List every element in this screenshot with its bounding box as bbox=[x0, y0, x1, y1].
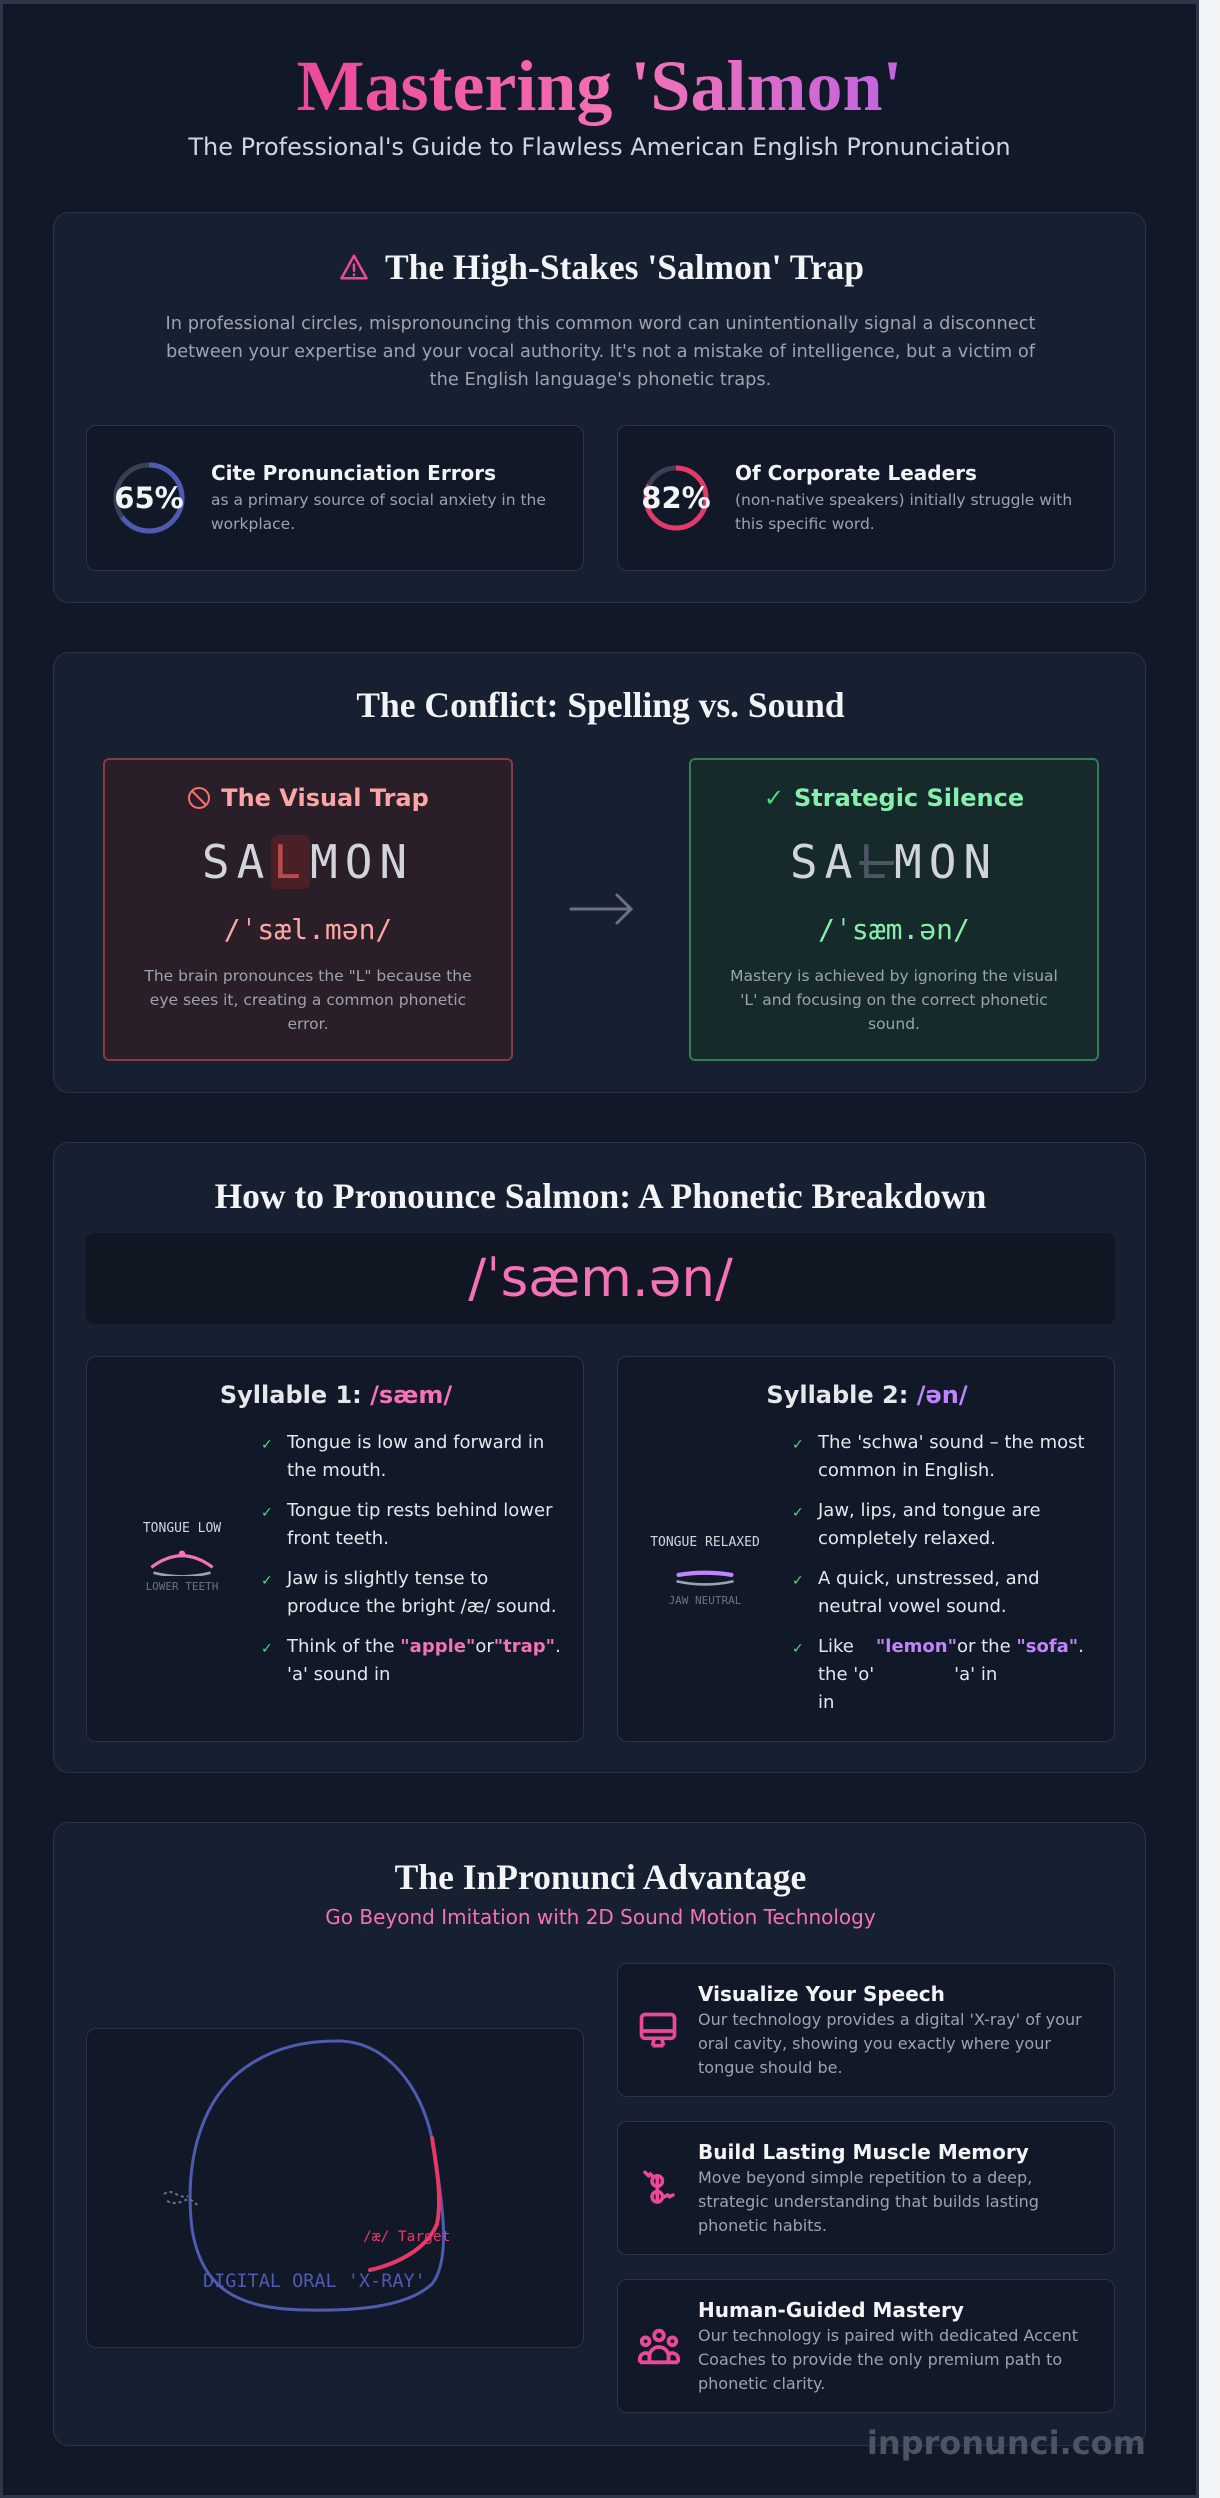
watermark: inpronunci.com bbox=[867, 2424, 1146, 2462]
ipa correct: /ˈsæm.ən/ bbox=[818, 913, 970, 946]
panel: conflict bbox=[53, 652, 1146, 1093]
stat card: 65%: as a primary source of social anxiety in the workplace. bbox=[211, 491, 546, 533]
subtitle: The Professional's Guide to Flawless American English Pronunciation bbox=[188, 133, 1011, 161]
card: syllable 2: common in English. bbox=[818, 1460, 995, 1481]
chart: digital oral x-ray bbox=[86, 2028, 584, 2348]
title: Mastering 'Salmon' bbox=[296, 46, 902, 126]
card: syllable 2: ✓ bbox=[792, 1573, 804, 1589]
intro paragraph: In professional circles, mispronouncing this common word can unintentionally signal a disconnect between your expertise and your vocal authority. It's not a mistake of intelligence, but a victim of the English language's phonetic traps. bbox=[166, 313, 1035, 390]
ipa banner: /ˈsæm.ən/ bbox=[468, 1248, 733, 1309]
arrow bbox=[570, 893, 633, 924]
syllable 2 title: Syllable 2: /ən/ bbox=[766, 1381, 968, 1409]
tongue low diagram: LOWER TEETH bbox=[146, 1580, 218, 1593]
feature card: visualize: Our technology provides a digital 'X-ray' of your oral cavity, showing you exactly where your tongue should be. bbox=[698, 2010, 1082, 2077]
card: syllable 1: 'a' sound in bbox=[287, 1664, 390, 1685]
ipa wrong: /ˈsæl.mən/ bbox=[224, 913, 392, 946]
stat card: 65%: 65% bbox=[114, 481, 184, 515]
card: syllable 1 bbox=[86, 1356, 584, 1742]
heading: breakdown: How to Pronounce Salmon: A Phonetic Breakdown bbox=[215, 1176, 986, 1216]
card title: visual trap: The Visual Trap bbox=[221, 784, 429, 812]
checklist syllable 2 bbox=[792, 1432, 1085, 1713]
card: syllable 1: the mouth. bbox=[287, 1460, 386, 1481]
stat card: 82%: Of Corporate Leaders bbox=[735, 461, 977, 485]
syllable 1 title: Syllable 1: /sæm/ bbox=[220, 1381, 452, 1409]
card: syllable 1: ✓ bbox=[261, 1505, 273, 1521]
feature card: human-guided bbox=[617, 2279, 1115, 2413]
card: syllable 2: A quick, unstressed, and bbox=[818, 1568, 1040, 1589]
card: syllable 2: The 'schwa' sound – the most bbox=[818, 1432, 1085, 1453]
icon: muscle bbox=[643, 2170, 675, 2204]
card title: strategic silence: ✓ Strategic Silence bbox=[764, 784, 1024, 812]
tongue relaxed diagram: TONGUE RELAXED bbox=[650, 1535, 760, 1550]
card: syllable 2: in bbox=[818, 1692, 834, 1713]
card: syllable 1: ✓ bbox=[261, 1437, 273, 1453]
card: syllable 2: ✓ bbox=[792, 1641, 804, 1657]
heading: conflict: The Conflict: Spelling vs. Sound bbox=[356, 685, 845, 725]
card: syllable 2: Jaw, lips, and tongue are bbox=[818, 1500, 1041, 1521]
description: The brain pronounces the "L" because the eye sees it, creating a common phonetic error. bbox=[144, 967, 472, 1033]
stat card: 82%: 82% bbox=[641, 481, 711, 515]
card: syllable 1: Tongue tip rests behind lower bbox=[287, 1500, 552, 1521]
feature card: muscle memory: Move beyond simple repetition to a deep, strategic understanding that builds lasting phonetic habits. bbox=[698, 2168, 1039, 2235]
panel: advantage bbox=[53, 1822, 1146, 2446]
checklist syllable 1 bbox=[261, 1432, 561, 1685]
ipa banner bbox=[86, 1233, 1115, 1324]
ring chart 65% bbox=[114, 462, 184, 534]
subheading: Go Beyond Imitation with 2D Sound Motion Technology bbox=[325, 1905, 876, 1929]
chart: digital oral x-ray: DIGITAL ORAL 'X-RAY' bbox=[203, 2271, 426, 2292]
heading: high-stakes: The High-Stakes 'Salmon' Trap bbox=[385, 247, 864, 287]
card: syllable 1: Think of the "apple"or"trap". bbox=[287, 1636, 561, 1657]
card: syllable 2: the 'o' 'a' in bbox=[818, 1664, 997, 1685]
icon: people bbox=[638, 2328, 680, 2364]
feature card: visualize bbox=[617, 1963, 1115, 2097]
card: syllable 1: Tongue is low and forward in bbox=[287, 1432, 544, 1453]
tongue relaxed diagram bbox=[650, 1535, 760, 1607]
card: syllable 1: ✓ bbox=[261, 1641, 273, 1657]
description: Mastery is achieved by ignoring the visual 'L' and focusing on the correct phonetic sound. bbox=[730, 967, 1058, 1033]
panel: high-stakes trap bbox=[53, 212, 1146, 603]
ring chart 82% bbox=[644, 466, 708, 530]
stat card: 82% bbox=[617, 425, 1115, 571]
stat card: 65%: Cite Pronunciation Errors bbox=[211, 461, 496, 485]
word: salmon silent L: SALMON bbox=[790, 835, 998, 889]
tongue low diagram: TONGUE LOW bbox=[143, 1521, 221, 1536]
word: salmon with L: SALMON bbox=[202, 835, 414, 889]
stat card: 65% bbox=[86, 425, 584, 571]
tongue low diagram bbox=[143, 1521, 222, 1593]
feature card: muscle memory bbox=[617, 2121, 1115, 2255]
feature card: muscle memory: Build Lasting Muscle Memory bbox=[698, 2140, 1029, 2164]
panel: phonetic breakdown bbox=[53, 1142, 1146, 1773]
card: syllable 2: completely relaxed. bbox=[818, 1528, 996, 1549]
card: syllable 2: neutral vowel sound. bbox=[818, 1596, 1007, 1617]
card: syllable 1: Jaw is slightly tense to bbox=[287, 1568, 488, 1589]
card: visual trap bbox=[103, 758, 513, 1061]
heading: advantage: The InPronunci Advantage bbox=[395, 1857, 806, 1897]
card: syllable 2 bbox=[617, 1356, 1115, 1742]
tongue relaxed diagram: JAW NEUTRAL bbox=[669, 1594, 741, 1607]
card: syllable 2: ✓ bbox=[792, 1437, 804, 1453]
card: syllable 2: Like "lemon"or the "sofa". bbox=[818, 1636, 1084, 1657]
icon: monitor bbox=[640, 2012, 676, 2048]
card: syllable 1: produce the bright /æ/ sound. bbox=[287, 1596, 557, 1617]
feature card: visualize: Visualize Your Speech bbox=[698, 1982, 945, 2006]
stat card: 82%: (non-native speakers) initially struggle with this specific word. bbox=[735, 491, 1072, 533]
card: syllable 2: ✓ bbox=[792, 1505, 804, 1521]
card: strategic silence bbox=[689, 758, 1099, 1061]
card: syllable 1: ✓ bbox=[261, 1573, 273, 1589]
card: syllable 1: front teeth. bbox=[287, 1528, 389, 1549]
chart: digital oral x-ray: /æ/ Target bbox=[363, 2229, 450, 2245]
feature card: human-guided: Our technology is paired with dedicated Accent Coaches to provide the only premium path to phonetic clarity. bbox=[698, 2326, 1078, 2393]
feature card: human-guided: Human-Guided Mastery bbox=[698, 2298, 964, 2322]
